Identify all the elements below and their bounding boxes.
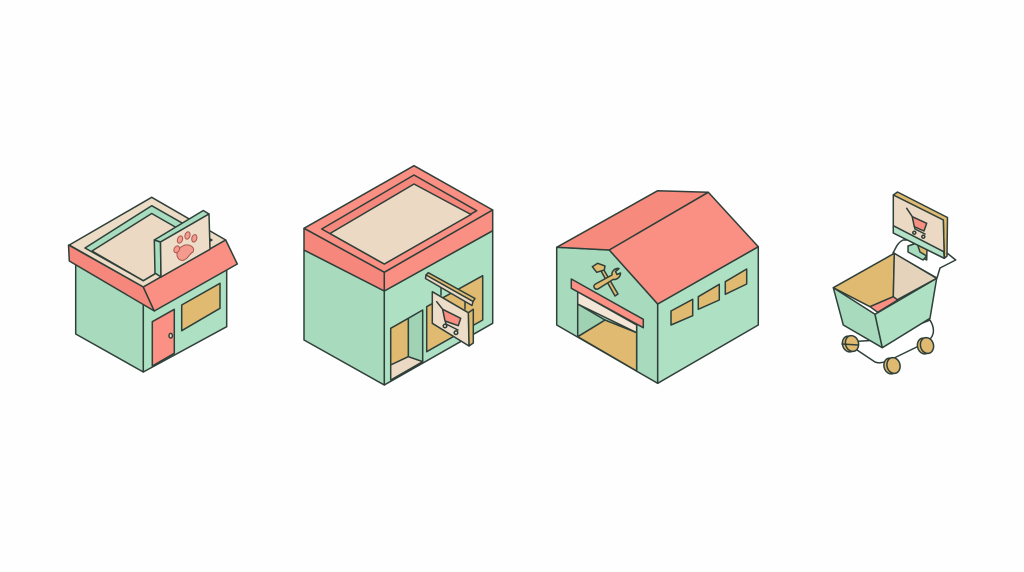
garage windows — [671, 269, 747, 325]
icon: hammer and wrench — [592, 263, 620, 296]
garage door opening — [578, 292, 637, 371]
pet shop door — [152, 309, 174, 366]
building: repair garage — [557, 191, 758, 383]
pet shop roof band right — [143, 240, 237, 311]
pet shop roof band left — [68, 245, 154, 311]
store left wall — [304, 250, 384, 385]
store window — [427, 276, 483, 352]
icon: monitor cart — [907, 208, 927, 238]
hanging sign — [426, 273, 475, 346]
lower cart frame — [845, 320, 933, 363]
store roof band left — [304, 228, 384, 291]
store roof band right — [384, 210, 493, 291]
building: grocery store — [304, 166, 493, 385]
building: pet shop — [68, 197, 237, 372]
store right wall — [384, 231, 493, 385]
pet shop roof top — [69, 197, 226, 287]
white outline path behind cart — [893, 240, 956, 278]
garage left wall — [557, 247, 658, 383]
garage roof right slope — [609, 192, 758, 304]
garage roof left slope — [557, 191, 708, 250]
store roof top — [304, 166, 493, 272]
pet shop sign — [154, 210, 210, 277]
sign bracket — [426, 273, 475, 309]
basket — [833, 253, 937, 348]
garage awning — [571, 279, 643, 328]
store door — [391, 310, 423, 380]
pet shop right wall — [143, 262, 227, 372]
monitor — [893, 192, 948, 260]
pet shop left wall — [76, 262, 143, 372]
pet shop window — [182, 283, 220, 331]
icon: paw print — [173, 231, 198, 260]
garage right wall — [658, 247, 758, 383]
cart wheels — [841, 334, 935, 375]
shopping cart with monitor — [833, 192, 956, 375]
icon: shopping cart — [437, 302, 461, 335]
